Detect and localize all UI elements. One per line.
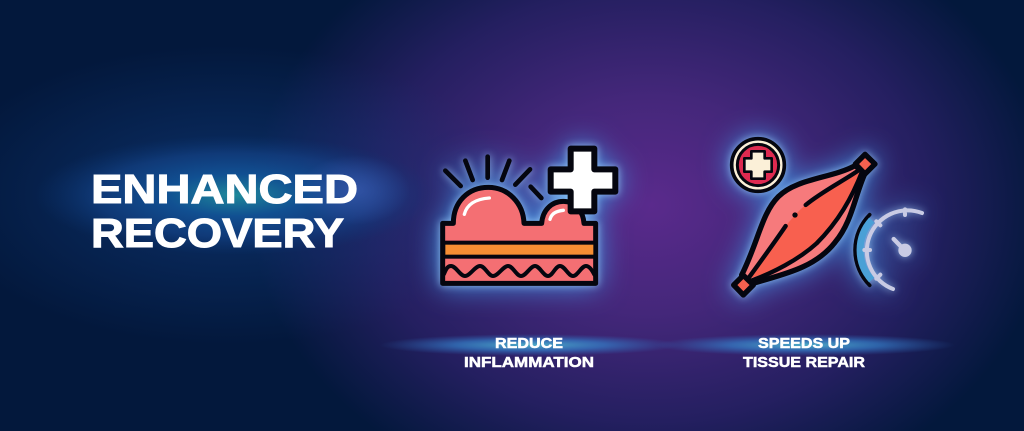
title: ENHANCED [91, 166, 358, 212]
label: reduce inflammation [464, 336, 594, 371]
plus [551, 149, 615, 211]
muscle dot [792, 212, 798, 218]
gauge needle [894, 239, 903, 249]
highlights [464, 198, 563, 219]
tendon ends [855, 154, 875, 174]
muscle body [742, 166, 865, 284]
label: reduce inflammation: INFLAMMATION [464, 355, 594, 371]
gauge dial [864, 209, 922, 289]
label: speeds up tissue repair [743, 336, 866, 371]
orange band [443, 243, 595, 257]
muscle lines [748, 170, 862, 280]
icon: inflamed skin with plus [443, 149, 615, 283]
wave [444, 266, 594, 276]
label: speeds up tissue repair: SPEEDS UP [758, 336, 850, 352]
title: RECOVERY [91, 210, 344, 256]
icon: muscle with medical badge and gauge [732, 139, 922, 295]
rays [445, 157, 541, 198]
title [91, 166, 358, 256]
gauge blue arc [855, 215, 870, 285]
muscle core [748, 170, 862, 278]
label: reduce inflammation: REDUCE [495, 336, 563, 352]
label: speeds up tissue repair: TISSUE REPAIR [743, 355, 866, 371]
medical badge [732, 139, 784, 191]
skin block [443, 187, 596, 283]
